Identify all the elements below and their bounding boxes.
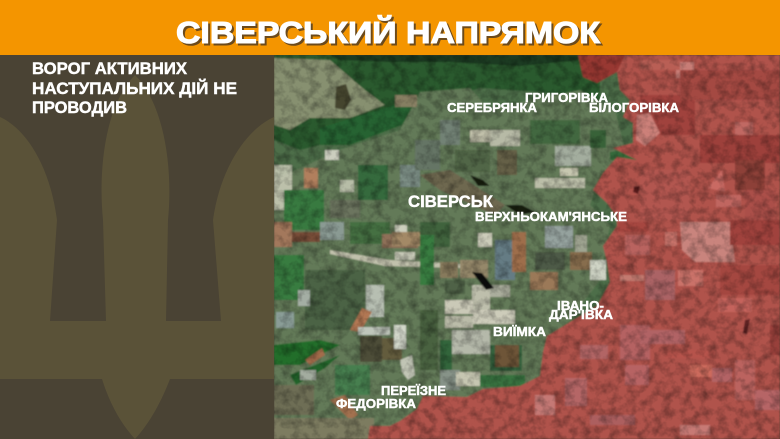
occupied fields	[535, 55, 780, 435]
label: Hryhorivka: ГРИГОРІВКА	[525, 91, 608, 105]
panel: left background	[0, 55, 274, 439]
label: Darivka: ДАР'ІВКА	[549, 308, 613, 322]
label: Ivano: ІВАНО-	[557, 299, 604, 313]
label: Siversk: СІВЕРСЬК	[408, 193, 494, 211]
map texture	[274, 55, 780, 439]
text block: enemy status: ПРОВОДИВ	[32, 99, 127, 117]
label: Serebrianka: СЕРЕБРЯНКА	[447, 101, 537, 115]
label: Verkhnokamianske: ВЕРХНЬОКАМ'ЯНСЬКЕ	[475, 210, 627, 224]
header bar	[0, 0, 780, 55]
title: СІВЕРСЬКИЙ НАПРЯМОК	[176, 14, 600, 50]
label: Pereizne: ПЕРЕЇЗНЕ	[381, 383, 446, 398]
map base terrain	[274, 72, 634, 412]
label: Vyimka: ВИЇМКА	[493, 324, 546, 339]
label: Fedorivka: ФЕДОРІВКА	[336, 397, 416, 411]
forest belt	[274, 55, 600, 150]
icon: trident emblem	[0, 75, 274, 439]
text block: enemy status	[32, 60, 237, 117]
fields	[274, 95, 638, 439]
map: satellite image	[274, 55, 780, 439]
text block: enemy status: НАСТУПАЛЬНИХ ДІЙ НЕ	[32, 79, 237, 98]
text block: enemy status: ВОРОГ АКТИВНИХ	[32, 60, 187, 78]
occupied area overlay	[368, 55, 780, 439]
label: Bilohorivka: БІЛОГОРІВКА	[589, 101, 679, 115]
title: СІВЕРСЬКИЙ НАПРЯМОК	[178, 16, 602, 52]
map labels	[336, 91, 679, 411]
